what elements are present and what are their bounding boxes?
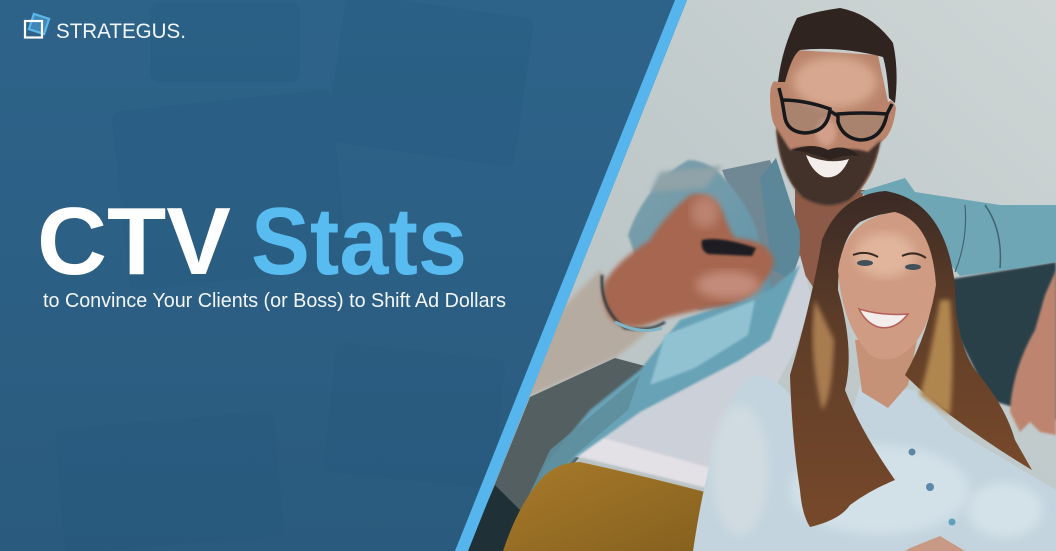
hair left [790, 191, 900, 527]
right hand on shoulder [1010, 270, 1056, 435]
man [503, 8, 1056, 551]
t-shirt [572, 255, 812, 490]
shirt flap lower left [541, 265, 800, 478]
woman [693, 191, 1056, 551]
hair [778, 8, 897, 103]
moustache [792, 146, 860, 160]
blouse buttons [908, 448, 916, 456]
forehead highlight [793, 56, 877, 108]
subtitle: to Convince Your Clients (or Boss) to Shift Ad Dollars [43, 290, 506, 312]
mouth smile [806, 155, 849, 177]
beard [776, 128, 881, 205]
shirt right shoulder and sleeve [860, 178, 1056, 276]
photo: couple on sofa [460, 0, 1056, 551]
title: Stats: Stats [251, 188, 467, 295]
hair highlights [813, 300, 834, 410]
pants [503, 462, 705, 551]
glasses [779, 88, 892, 140]
sofa right [945, 262, 1056, 420]
shirt placket [760, 158, 800, 282]
forearm and hand [603, 194, 774, 326]
faint background tiles [54, 0, 535, 551]
title: CTV: CTV [37, 188, 231, 295]
blue panel [60, 466, 466, 551]
blouse [693, 376, 1056, 551]
extended sleeve [628, 160, 775, 310]
eyebrows and eyes [853, 253, 878, 257]
head [770, 50, 896, 205]
wall [460, 0, 1056, 551]
panel background [0, 0, 690, 551]
logo wordmark: STRATEGUS. [56, 20, 186, 43]
neck [855, 335, 918, 408]
face [838, 212, 936, 359]
title [37, 188, 467, 295]
skin at waist [905, 536, 965, 551]
man's neck [795, 190, 865, 290]
diagonal light-blue band [455, 0, 687, 551]
sofa left [468, 358, 660, 551]
cuff [602, 275, 665, 329]
remote [702, 239, 756, 256]
man's grey collar [722, 160, 800, 290]
logo icon [25, 14, 49, 38]
woman's smile [859, 309, 908, 328]
logo: Strategus [25, 14, 186, 43]
hair right [885, 191, 1032, 470]
beige lower wall [525, 270, 650, 398]
